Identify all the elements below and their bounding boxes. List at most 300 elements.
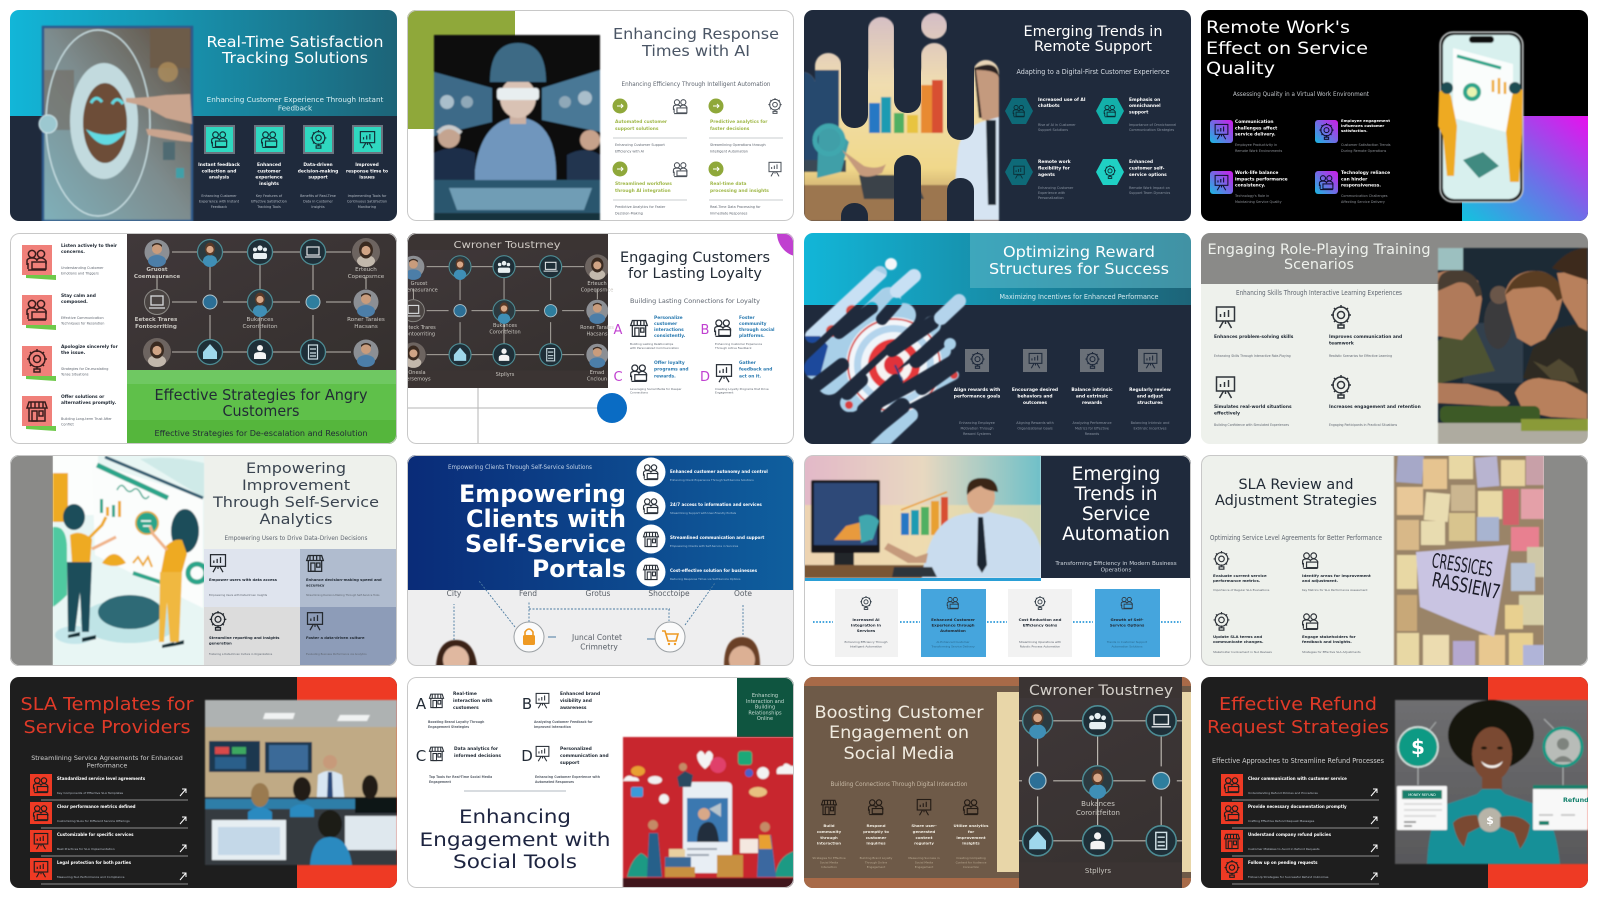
feature labels <box>198 162 388 187</box>
title line 2: Remote Support <box>1034 39 1153 55</box>
benefit notes <box>670 478 754 581</box>
reward labels: Align rewards with <box>954 387 1000 393</box>
strategy labels: Apologize sincerely for <box>61 344 119 350</box>
network captions: Roner Taraies <box>580 325 614 331</box>
title: Effective Strategies for Angry <box>154 386 368 404</box>
title line 2: Improvement <box>242 478 350 494</box>
gradient icon tiles <box>1210 120 1338 194</box>
card border <box>10 234 396 444</box>
loyalty notes: Connections <box>630 391 648 395</box>
strategy notes: Understanding Customer <box>61 266 104 270</box>
trend notes: Intelligent Automation <box>850 644 882 648</box>
network captions: Gruost <box>411 281 427 287</box>
sticky note text: CRESSICES <box>1430 548 1494 581</box>
feature labels: Predictive analytics for <box>710 119 768 125</box>
engagement notes: Engagement <box>429 780 451 784</box>
card: Real-Time Satisfaction Tracking Solutions <box>10 10 397 221</box>
trend labels: Increased use of AI <box>1038 97 1086 103</box>
lower photo background <box>407 590 794 666</box>
line icons <box>673 98 782 177</box>
card: Enhancing Engagement with Social Tools <box>407 677 796 888</box>
benefit labels <box>670 469 768 573</box>
title: Effective Refund <box>1219 694 1377 715</box>
card: Boosting Customer Engagement on Social Media <box>804 677 1262 888</box>
title line 2: Structures for Success <box>989 260 1169 278</box>
feature labels: insights <box>259 181 279 187</box>
eyebrow text: Empowering Clients Through Self-Service Solutions <box>448 464 592 471</box>
action labels: content <box>916 835 933 840</box>
card: Optimizing Reward Structures for Success <box>804 233 1191 444</box>
card background <box>407 233 794 444</box>
teal header band <box>10 10 397 116</box>
loyalty labels: community <box>739 321 767 327</box>
divider rules <box>1232 800 1379 884</box>
purple corner <box>777 209 825 257</box>
action labels: Respond <box>867 823 886 828</box>
card border <box>10 456 396 666</box>
icon circles <box>636 458 666 586</box>
review notes <box>1213 588 1368 654</box>
loyalty labels: programs and <box>654 367 689 373</box>
engagement labels: communication and <box>560 753 609 759</box>
network captions: Eeteck Trares <box>135 317 178 323</box>
action labels: community <box>817 829 842 834</box>
analytics notes: Empowering Users with Data-Driven Insights <box>209 593 268 597</box>
template notes: Measuring SLA Performance and Compliance <box>57 875 125 879</box>
review notes: Importance of Regular SLA Evaluations <box>1213 588 1270 592</box>
action notes: Interaction <box>821 865 837 869</box>
action notes: Measuring Success in <box>908 856 940 860</box>
reward notes: Aligning Rewards with <box>1016 421 1054 425</box>
card: Enhancing Response Times with AI <box>407 10 794 221</box>
title: Real-Time Satisfaction <box>206 33 384 51</box>
card background <box>804 10 1191 221</box>
reward labels: Encourage desired <box>1012 387 1058 393</box>
trend notes: AI-Enhanced Customer <box>936 640 970 644</box>
title: Enhancing <box>459 807 571 828</box>
card: SLA Templates for Service Providers <box>10 677 397 888</box>
strategy notes: Building Long-term Trust After <box>61 417 112 421</box>
title: Emerging Trends in <box>1024 24 1162 40</box>
green block text: Online <box>757 716 773 722</box>
feature labels: Streamlined workflows <box>615 181 672 187</box>
review notes: Stakeholder Involvement in SLA Reviews <box>1213 650 1272 654</box>
effect notes: Technology's Role in <box>1234 194 1269 198</box>
bottom strip <box>804 878 1191 888</box>
feature labels: Instant feedback <box>198 162 240 168</box>
feature labels: response time to <box>346 168 388 174</box>
network captions <box>1076 800 1120 875</box>
analytics labels: Foster a data-driven culture <box>306 636 365 640</box>
illustration: women at dashboard <box>53 455 206 666</box>
reward labels: Balance intrinsic <box>1071 387 1113 393</box>
trend notes: Automation Solutions <box>1111 644 1143 648</box>
feature labels: Enhanced <box>257 162 281 168</box>
refund notes <box>1248 791 1329 879</box>
arrows <box>180 789 186 880</box>
panel: top left <box>204 549 300 607</box>
template labels: Legal protection for both parties <box>57 860 132 865</box>
letter markers <box>416 695 533 765</box>
network captions: Coemasurance <box>400 288 438 294</box>
review labels: Identify areas for improvement <box>1302 573 1371 578</box>
feature labels: faster decisions <box>710 126 750 132</box>
trend notes <box>845 640 1148 648</box>
engagement labels: interaction with <box>453 698 492 704</box>
network captions: Cororitfeiton <box>1076 809 1120 817</box>
trend notes: Communication Strategies <box>1129 128 1174 132</box>
skill labels: Increases engagement and retention <box>1329 404 1421 410</box>
network captions: Persemoys <box>403 376 431 382</box>
line icons <box>1216 305 1351 398</box>
benefit labels: Streamlined communication and support <box>670 535 764 540</box>
trend notes: Importance of Omnichannel <box>1129 123 1176 127</box>
card: Remote Work's Effect on Service Quality <box>1201 10 1588 221</box>
subtitle: Feedback <box>278 104 313 113</box>
action labels: through <box>820 835 838 840</box>
network captions: Bukances <box>247 317 274 323</box>
network captions: Cororitfeiton <box>489 330 521 336</box>
effect notes: During Remote Operations <box>1341 149 1387 153</box>
network captions: Stpllyrs <box>1085 867 1111 875</box>
feature labels: issues <box>359 175 375 181</box>
title: SLA Review and <box>1238 477 1354 493</box>
effect notes: Maintaining Service Quality <box>1235 200 1282 204</box>
subtitle: Effective Strategies for De-escalation and Resolution <box>154 429 368 438</box>
title line 2: Request Strategies <box>1207 717 1389 738</box>
skill notes: Building Confidence with Simulated Experiences <box>1214 423 1289 427</box>
letter markers: A <box>416 695 427 713</box>
photo: men at tabletop <box>1438 248 1588 444</box>
action labels: for <box>968 829 974 834</box>
title: Portals <box>532 555 626 583</box>
action notes: Strategies for Effective <box>812 856 846 860</box>
cart node <box>655 622 685 652</box>
network captions: Fontoorriting <box>403 332 435 338</box>
feature notes: Benefits of Real-Time <box>300 194 336 198</box>
template labels: Standardized service level agreements <box>57 776 146 781</box>
skill notes: Engaging Participants in Practical Situations <box>1329 423 1397 427</box>
green block text: Relationships <box>748 710 782 716</box>
strategy notes: Tense Situations <box>60 372 89 376</box>
trend labels: Service Options <box>1110 622 1145 628</box>
trend cards <box>835 589 1160 657</box>
loyalty notes <box>630 342 769 395</box>
reward notes: Enhancing Employee <box>959 421 995 425</box>
trend notes <box>1038 123 1176 200</box>
review labels: performance metrics. <box>1213 578 1261 583</box>
gray strip <box>1544 455 1588 666</box>
card background <box>407 10 794 221</box>
feature notes: Enhancing Customer Support <box>615 143 665 147</box>
subtitle: Building Connections Through Digital Interaction <box>830 781 968 788</box>
trend labels: omnichannel <box>1129 103 1161 109</box>
action notes: Content for Audience <box>956 860 987 864</box>
title: Service <box>1082 504 1150 525</box>
gray header <box>1201 233 1588 284</box>
review labels: communicate changes. <box>1213 639 1264 644</box>
coin symbol: $ <box>1411 735 1425 759</box>
strategy notes: Conflict <box>61 422 75 426</box>
effect labels: Employee engagement <box>1341 118 1390 123</box>
template notes: Key Components of Effective SLA Templates <box>57 791 124 795</box>
loyalty labels: interactions <box>654 327 684 333</box>
title: Automation <box>1062 524 1170 545</box>
strategy notes: Effective Communication <box>61 316 104 320</box>
loyalty notes: Creating Loyalty Programs that Drive <box>715 387 769 391</box>
reward labels <box>954 387 1171 406</box>
network captions <box>134 267 385 330</box>
card background <box>1201 455 1588 666</box>
feature labels: analysis <box>209 175 229 181</box>
title: Remote Work's <box>1206 18 1350 38</box>
dark strip <box>127 420 397 444</box>
benefit labels: Cost-effective solution for businesses <box>670 568 758 573</box>
title: Boosting Customer <box>814 703 984 722</box>
action labels: Share user- <box>911 823 937 828</box>
reward labels: rewards <box>1082 400 1102 406</box>
card border <box>408 10 794 220</box>
network captions: Bukances <box>493 323 517 329</box>
subtitle: Maximizing Incentives for Enhanced Performance <box>1000 293 1158 301</box>
benefit notes: Streamlining Support with User-Friendly Portals <box>670 511 737 515</box>
effect labels: Communication <box>1235 119 1273 125</box>
effect notes: Employee Productivity in <box>1235 143 1277 147</box>
right card mock text: Refund <box>1563 796 1589 804</box>
divider <box>464 790 566 792</box>
grid lines <box>407 388 627 444</box>
title: Engaging Customers <box>620 250 770 266</box>
engagement notes: Enhancing Customer Experience with <box>535 775 600 779</box>
feature labels: experience <box>255 175 283 181</box>
flow captions: Grotus <box>586 589 611 598</box>
network captions: Ernad <box>590 370 604 376</box>
trend labels: Enhanced <box>1129 159 1153 165</box>
action notes <box>812 856 987 869</box>
arrow badges <box>612 98 724 176</box>
feature labels: support <box>308 175 328 181</box>
subtitle: Operations <box>1101 568 1131 574</box>
action notes: Building Brand Loyalty <box>860 856 893 860</box>
reward labels: and adjust <box>1137 393 1163 399</box>
flow captions <box>447 589 752 598</box>
network captions: Roner Taraies <box>347 317 385 323</box>
feature labels: Data-driven <box>303 162 333 168</box>
engagement labels: customers <box>453 705 479 711</box>
feature labels: through AI integration <box>615 188 671 194</box>
review labels <box>1213 573 1371 644</box>
skill labels: teamwork <box>1329 340 1354 346</box>
network captions: Cncloun <box>587 376 607 382</box>
subtitle: Optimizing Service Level Agreements for Better Performance <box>1210 534 1382 542</box>
card background <box>1201 233 1588 444</box>
action notes: Social Media <box>820 860 838 864</box>
lock node <box>514 622 544 652</box>
title line 3: Social Tools <box>453 852 577 873</box>
title <box>814 703 984 763</box>
letter markers: D <box>700 370 710 385</box>
trend notes: Trends in Customer Support <box>1106 640 1148 644</box>
card background <box>1201 677 1588 888</box>
refund labels: Clear communication with customer service <box>1248 776 1347 781</box>
action labels: insights <box>962 841 980 846</box>
portrait: woman <box>436 640 477 674</box>
green block text: Building <box>755 705 775 711</box>
card border <box>408 678 794 888</box>
action labels: generated <box>913 829 936 834</box>
review labels: Evaluate current service <box>1213 573 1267 578</box>
trend notes: Experience with <box>1038 191 1065 195</box>
action labels: regularly <box>914 841 934 846</box>
trend labels: service options <box>1129 172 1167 178</box>
feature labels <box>615 119 769 194</box>
template labels: Clear performance metrics defined <box>57 804 136 809</box>
loyalty labels: Gather <box>739 360 757 366</box>
skill labels: Simulates real-world situations <box>1214 404 1292 410</box>
dark green block <box>737 677 794 737</box>
feature notes: Monitoring <box>358 205 376 209</box>
line icons <box>429 693 549 761</box>
refund notes: Follow-Up Strategies for Successful Refund Outcomes <box>1248 875 1329 879</box>
title line 2: Engagement with <box>420 830 610 851</box>
network heading: Cwroner Toustrney <box>1029 683 1173 699</box>
card: Effective Strategies for Angry Customers <box>10 233 397 444</box>
card border <box>1202 456 1588 666</box>
effect labels: service delivery. <box>1235 132 1276 138</box>
trend notes: Rise of AI in Customer <box>1038 123 1076 127</box>
brown background <box>804 677 1191 888</box>
engagement notes: Boosting Brand Loyalty Through <box>428 720 484 724</box>
title line 2: Service Providers <box>24 717 190 738</box>
reward labels: structures <box>1137 400 1163 406</box>
card: Emerging Trends in Remote Support <box>804 10 1191 221</box>
reward labels: performance goals <box>954 393 1001 399</box>
benefit notes: Reducing Response Times via Self-Service Options <box>670 577 741 581</box>
reward notes: Metrics for Effective <box>1075 427 1109 431</box>
line icons <box>1214 551 1318 630</box>
network captions: Fontoorriting <box>135 324 177 330</box>
skill labels: effectively <box>1214 410 1240 416</box>
loyalty labels: through social <box>739 327 775 333</box>
network photo <box>938 677 1262 888</box>
title: Empowering <box>459 480 626 508</box>
title line 2: Effect on Service <box>1206 39 1368 59</box>
letter markers: A <box>614 323 623 338</box>
trend labels: Automation <box>940 628 966 633</box>
action labels: improvement <box>956 835 986 840</box>
trend labels <box>851 617 1145 633</box>
network captions: Erteuch <box>355 267 377 273</box>
refund notes: Customer Mistakes to Avoid in Refund Requests <box>1248 847 1320 851</box>
effect labels: challenges affect <box>1235 125 1277 131</box>
title: Engagement on <box>829 723 969 742</box>
title: Engaging Role-Playing Training <box>1208 242 1430 258</box>
network captions: Eeteck Trares <box>402 325 436 331</box>
trend labels: Growth of Self- <box>1110 617 1144 622</box>
loyalty labels <box>654 315 775 379</box>
card mock text: MONEY REFUND <box>1408 793 1436 797</box>
feature notes: Real-Time Data Processing for <box>710 205 761 209</box>
reward notes: Analyzing Performance <box>1072 421 1112 425</box>
feature notes: Effective Satisfaction <box>251 199 287 203</box>
analytics labels: Streamline reporting and insights <box>209 636 280 640</box>
network photo <box>387 233 625 388</box>
skill notes: Realistic Scenarios for Effective Learning <box>1329 354 1392 358</box>
blue circle <box>597 393 627 423</box>
feature notes: Experience with Instant <box>199 199 240 203</box>
loyalty labels: consistently. <box>654 333 686 339</box>
effect notes: Customer Satisfaction Trends <box>1341 143 1391 147</box>
photo: woman holding coin <box>1395 700 1588 864</box>
subtitle: Empowering Users to Drive Data-Driven Decisions <box>224 535 368 542</box>
teal header <box>804 233 1191 305</box>
trend labels <box>1038 97 1167 178</box>
title <box>459 480 626 583</box>
analytics notes: Streamlining Decision-Making Through Self-Service Tools <box>306 593 380 597</box>
line icons <box>210 555 323 630</box>
review labels: and adjustment. <box>1302 578 1339 583</box>
action labels: inquiries <box>866 841 886 846</box>
refund notes: Understanding Refund Policies and Procedures <box>1248 791 1318 795</box>
strategy labels: Stay calm and <box>61 293 96 299</box>
feature notes: Key Features of <box>256 194 283 198</box>
card background <box>804 455 1191 666</box>
title line 2: Tracking Solutions <box>221 49 368 67</box>
strategy labels: concerns. <box>61 249 85 255</box>
reward notes: Organizational Goals <box>1017 427 1053 431</box>
trend labels: Emphasis on <box>1129 97 1160 103</box>
card: Emerging Trends in Service Automation <box>804 455 1191 666</box>
trend notes: Enhancing Efficiency Through <box>845 640 888 644</box>
reward labels: Regularly review <box>1129 387 1171 393</box>
analytics notes: Evaluating Business Performance via Analytics <box>306 652 367 656</box>
letter markers: C <box>613 370 623 385</box>
engagement labels: Real-time <box>453 691 477 697</box>
engagement labels: Personalized <box>560 746 592 752</box>
network photo <box>127 233 397 370</box>
title: Optimizing Reward <box>1003 243 1155 261</box>
action notes: Through Online <box>864 860 887 864</box>
trend notes: Remote Work Impact on <box>1129 186 1170 190</box>
engagement labels: Data analytics for <box>454 746 499 752</box>
network captions: Onesla <box>408 370 426 376</box>
feature notes: Decision-Making <box>615 211 643 215</box>
feature notes: Enhancing Customer <box>201 194 237 198</box>
action notes: Engagement <box>867 865 886 869</box>
title: Social Media <box>844 744 954 763</box>
letter markers: B <box>701 323 709 338</box>
trend labels: Experience through <box>931 622 975 628</box>
green accent block <box>407 10 515 129</box>
action notes: Engagement <box>915 865 934 869</box>
effect labels: impacts performance <box>1235 176 1288 182</box>
flow captions: City <box>447 589 462 598</box>
dark mask pills <box>841 21 974 221</box>
skill labels <box>1214 334 1421 416</box>
sticky note text <box>1430 548 1502 604</box>
feature labels: decision-making <box>298 168 338 174</box>
subtitle: Adapting to a Digital-First Customer Experience <box>1016 68 1170 76</box>
engagement notes: Improved Interaction <box>534 725 571 729</box>
feature labels: processing and insights <box>710 188 769 194</box>
trend notes: Personalization <box>1038 196 1064 200</box>
action labels <box>817 823 989 846</box>
card background <box>1201 10 1588 221</box>
subtitle: Effective Approaches to Streamline Refund Processes <box>1212 757 1384 765</box>
trend labels: chatbots <box>1038 103 1060 109</box>
card: SLA Review and Adjustment Strategies <box>1201 454 1588 666</box>
dark body <box>804 305 1191 444</box>
